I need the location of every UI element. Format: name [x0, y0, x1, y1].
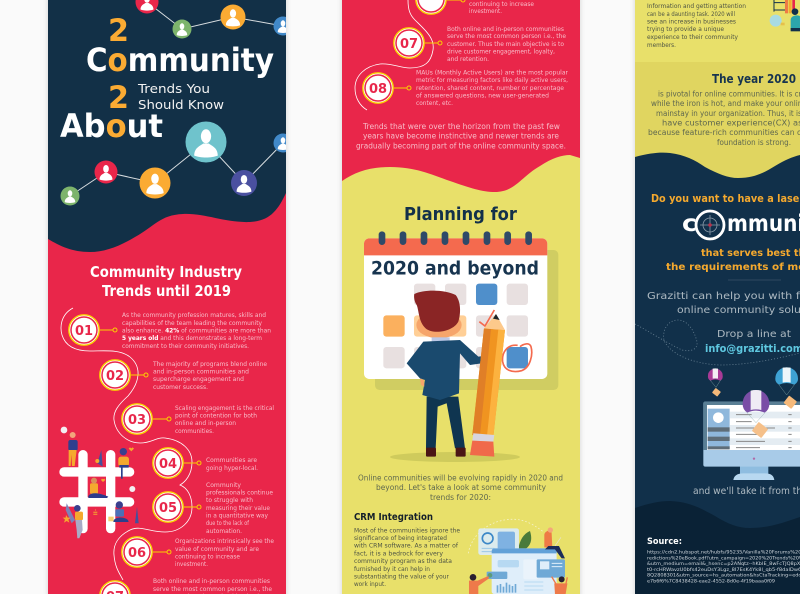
CRM text: work input. [354, 581, 386, 588]
trend text 08: of answered questions, new user-generated [416, 92, 549, 100]
panel: trends until 2019 [48, 0, 292, 594]
illustration: calendar and man [364, 231, 558, 462]
heading: planning for: Planning for [404, 204, 517, 225]
trend text 03: communities. [175, 428, 214, 435]
trend text 08: content, etc. [416, 100, 453, 107]
panel: trends continued and planning [342, 0, 580, 594]
trend text 05: automation. [206, 528, 242, 535]
CRM text end: Information and getting attention [647, 3, 746, 10]
trend text 03 [175, 405, 274, 435]
title: 2 [108, 13, 129, 49]
summary text: gradually becoming part of the online community space. [356, 141, 566, 150]
CRM text end: trying to provide a unique [647, 26, 724, 33]
CRM text: furnished by it can help in [354, 566, 430, 573]
summary text [356, 122, 566, 150]
number badges: 05 [159, 501, 177, 516]
stems [100, 328, 202, 554]
trend text 07: Both online and in-person communities [447, 26, 564, 33]
illustration: CRM dashboard [468, 519, 567, 594]
number badges: 01 [75, 324, 93, 339]
parachute blue [775, 367, 798, 409]
trend text 01: 5 years old and this demonstrates a long-term [122, 335, 262, 342]
illustration: ideas team [770, 0, 800, 31]
title: About [60, 107, 163, 145]
trend text 01: commitment to their community initiatives. [122, 343, 249, 350]
trend text 05: due to the lack of [206, 520, 250, 527]
summary text: years have become instinctive and newer trends are [363, 132, 559, 141]
trend text 02 [152, 361, 267, 391]
parachute purple [743, 390, 769, 438]
number badges: 07 [400, 37, 418, 52]
trend text 06 end: investment. [469, 8, 502, 15]
trend text 05: to struggle with [206, 497, 253, 504]
trend text 06 end: continuing to increase [469, 1, 534, 8]
source url [647, 550, 800, 584]
intro text: beyond. Let's take a look at some community [376, 483, 546, 492]
subtitle [138, 84, 224, 109]
illustration: monitor and parachutes [703, 367, 800, 480]
number badges: 06 [128, 546, 146, 561]
contact text [647, 291, 800, 340]
trend text 03: point of contention for both [175, 412, 257, 420]
CRM text end: experience to their community [647, 34, 738, 41]
trend text 05: professionals continue [206, 490, 273, 496]
stems [394, 0, 465, 90]
subtitle: Trends You [137, 81, 210, 96]
CRM text: community program as the data [354, 558, 452, 565]
year text [648, 90, 800, 147]
trend text 08: retention, shared content, number or percentage [416, 85, 564, 92]
title [60, 13, 274, 145]
title: Community [86, 41, 274, 79]
trend text 03: Scaling engagement is the critical [175, 405, 274, 412]
heading [90, 266, 242, 296]
CRM text end: can be a daunting task. 2020 will [647, 11, 735, 18]
CRM text [354, 528, 460, 588]
trend text 02: and in-person communities and [153, 368, 249, 376]
trend text 07 start: serve the most common person i.e., the [153, 586, 272, 593]
year text: foundation is strong. [717, 138, 791, 147]
community wordmark with target [682, 211, 800, 239]
call to action subtitle [666, 248, 800, 273]
trend text 04: going hyper-local. [206, 465, 258, 472]
trend text 07 start: Both online and in-person communities [153, 578, 270, 585]
ground shadow [390, 452, 520, 462]
number badges: 02 [106, 369, 124, 384]
source url: redictions%20eBook.pdf?utm_campaign=2020%20Trends%20Webinar [647, 555, 800, 560]
trend text 06 [175, 538, 274, 568]
trend text 07: customer. Thus the main objective is to [447, 41, 564, 48]
source url: https://cdn2.hubspot.net/hubfs/95235/Vanilla%20Forums%20-%20Sl [647, 550, 800, 554]
CRM text: with CRM software. As a matter of [354, 543, 459, 550]
calendar [364, 231, 558, 390]
CRM text end [647, 3, 746, 49]
source url: e7b6f6%7C8438428-eae2-4552-8d0e-4f19baaa0f09 [647, 578, 775, 584]
trend text 07 start [153, 578, 272, 594]
intro text: Online communities will be evolving rapidly in 2020 and [358, 474, 563, 482]
title: 2 [108, 80, 129, 116]
trend text 07 [447, 26, 566, 63]
CRM text: Most of the communities ignore the [354, 528, 460, 534]
CRM text: fact, it is a bedrock for every [354, 550, 443, 558]
trend text 04: Communities are [206, 457, 257, 464]
intro text: trends for 2020: [430, 493, 491, 502]
trend text 02: customer success. [153, 384, 208, 391]
trend text 06: value of community and are [175, 546, 259, 553]
dotted flight path [635, 320, 800, 365]
subtitle: Should Know [138, 97, 224, 112]
timeline curve [355, 0, 433, 110]
summary text: Trends that were over the horizon from the past few [362, 122, 560, 131]
trend text 05: measuring their value [206, 505, 270, 512]
dark footer wave [635, 501, 800, 594]
source url: &utm_medium=email&_hsenc=p2ANqtz--hKbIE_8wFcTJQ8pXD8sKHt [647, 561, 800, 566]
network links [78, 8, 277, 192]
trend text 05 [206, 482, 273, 535]
number badges [363, 0, 446, 103]
trend text 03: online and in-person [175, 420, 236, 427]
header navy wave [48, 0, 286, 252]
source url: 8Q2808301&utm_source=hs_automation&hsCtaTracking=edd4e74d- [647, 573, 800, 578]
pencil [470, 314, 505, 457]
trend text 05: Community [206, 482, 241, 489]
trend text 01 [122, 312, 271, 350]
number badges: 04 [159, 457, 177, 472]
trend text 05: in a quantitative way [206, 512, 268, 520]
number badges: 03 [128, 413, 146, 428]
calendar: 2020 and beyond [371, 258, 539, 279]
navy section [635, 153, 800, 594]
parachute pink [708, 368, 723, 397]
CRM text: substantiating the value of your [354, 574, 449, 580]
CRM text end: members. [647, 42, 676, 49]
number badges: 08 [369, 82, 387, 97]
trend text 06 end [469, 1, 534, 13]
number badges [69, 315, 183, 594]
trend text 06: Organizations intrinsically see the [175, 538, 274, 545]
trend text 01: capabilities of the team leading the community [122, 320, 262, 327]
trend text 01: also enhance. 42% of communities are more than [122, 328, 271, 334]
trend text 01: As the community profession matures, skills and [122, 312, 266, 319]
source heading: Source: [647, 537, 682, 547]
trend text 02: supercharge engagement and [153, 376, 244, 383]
trend text 02: The majority of programs blend online [152, 361, 267, 368]
icon: hashtag with people [59, 427, 139, 538]
man [406, 290, 481, 457]
yellow wave [342, 155, 580, 594]
heading: Community Industry [90, 263, 242, 281]
source url: t0-rcHRWavzU0bfs42euDsY3Lgz_8I7EsK4Yk8l_qb5-f8dalDw6L_hsmi [647, 567, 800, 572]
trend text 08: metric for measuring factors like daily active users, [416, 77, 568, 84]
trend text 06: investment. [175, 561, 208, 568]
trend text 07: drive customer engagement, loyalty, [447, 48, 555, 56]
CRM text end: see an increase in businesses [647, 18, 736, 26]
trend text 08 [416, 70, 568, 107]
community wordmark with target: c [682, 211, 697, 237]
trend text 07: serve the most common person i.e., the [447, 33, 566, 40]
heading: Trends until 2019 [102, 282, 231, 300]
network nodes [60, 0, 292, 206]
CRM text: significance of being integrated [354, 535, 447, 542]
contact text: Drop a line at [717, 329, 791, 340]
trend text 04 [206, 457, 258, 472]
trend text 06: continuing to increase [175, 554, 240, 560]
timeline curve [61, 308, 192, 580]
heading: CRM integration: CRM Integration [354, 512, 433, 523]
trend text 08: MAUs (Monthly Active Users) are the most popular [416, 70, 568, 76]
panel: conclusion [635, 0, 800, 594]
intro text [358, 474, 562, 500]
trend text 07: and retention. [447, 56, 489, 63]
